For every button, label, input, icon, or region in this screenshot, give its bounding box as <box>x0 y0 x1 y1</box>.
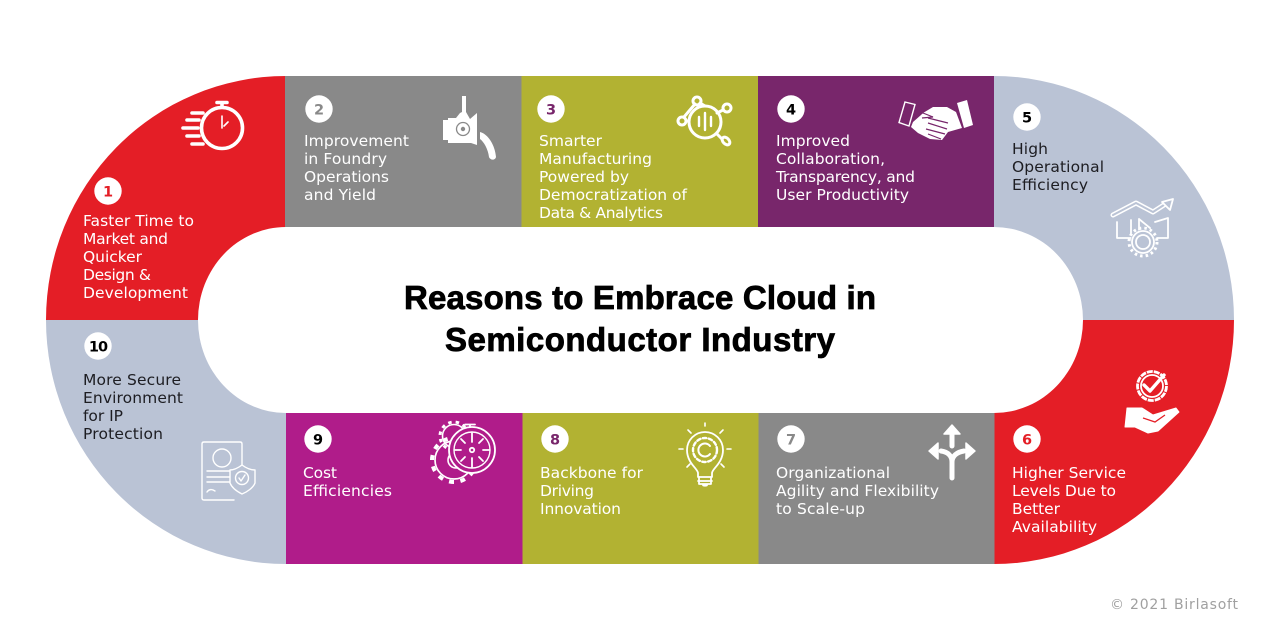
panel 10: secure environment: for IP <box>83 407 123 425</box>
panel 8: driving innovation <box>522 413 758 564</box>
panel 1: faster time to market: Market and <box>83 230 168 248</box>
panel 3: smarter manufacturing <box>522 76 758 227</box>
title <box>404 279 876 358</box>
panel 3: smarter manufacturing: Democratization of <box>539 186 688 204</box>
panel 5: operational efficiency: High <box>1012 140 1048 158</box>
panel 6: service levels <box>994 320 1234 564</box>
panel 6: service levels: Levels Due to <box>1012 482 1116 500</box>
panel 1: faster time to market: 1 <box>103 184 113 200</box>
panel 4: collaboration: Improved <box>776 132 850 150</box>
panel 9: cost efficiencies <box>286 413 522 564</box>
panel 3: smarter manufacturing: Manufacturing <box>539 150 652 168</box>
panel 10: secure environment <box>46 320 286 564</box>
panel 8: driving innovation: Innovation <box>540 500 621 518</box>
panel 6: service levels: Availability <box>1012 518 1097 536</box>
title: Semiconductor Industry <box>445 321 836 358</box>
panel 8: driving innovation: Backbone for <box>540 464 644 482</box>
panel 1: faster time to market: Quicker <box>83 248 143 266</box>
panel 2: foundry operations: 2 <box>314 102 324 118</box>
panel 3: smarter manufacturing: Powered by <box>539 168 629 186</box>
panel 9: cost efficiencies: 9 <box>313 432 323 448</box>
panel 4: collaboration: 4 <box>786 102 796 118</box>
panel 2: foundry operations: and Yield <box>304 186 376 204</box>
panel 2: foundry operations: in Foundry <box>304 150 387 168</box>
panel 7: organizational agility: Agility and Flexibility <box>776 482 939 500</box>
panel 1: faster time to market: Design & <box>83 266 151 284</box>
copyright: © 2021 Birlasoft <box>1110 597 1238 613</box>
panel 3: smarter manufacturing: Data & Analytics <box>539 204 663 222</box>
panel 5: operational efficiency: Efficiency <box>1012 176 1088 194</box>
panel 7: organizational agility: 7 <box>786 432 796 448</box>
panel 1: faster time to market: Development <box>83 284 188 302</box>
panel 3: smarter manufacturing: 3 <box>546 102 556 118</box>
panel 10: secure environment: Protection <box>83 425 163 443</box>
panel 4: collaboration <box>758 76 994 227</box>
panel 2: foundry operations: Operations <box>304 168 389 186</box>
panel 1: faster time to market: Faster Time to <box>83 212 194 230</box>
panel 6: service levels: Higher Service <box>1012 464 1126 482</box>
panel 5: operational efficiency <box>994 76 1234 320</box>
panel 4: collaboration: Transparency, and <box>775 168 915 186</box>
panel 10: secure environment: Environment <box>83 389 183 407</box>
panel 8: driving innovation: Driving <box>540 482 594 500</box>
panel 10: secure environment: 10 <box>89 340 108 356</box>
panel 7: organizational agility <box>758 413 994 564</box>
panel 5: operational efficiency: 5 <box>1022 110 1032 126</box>
panel 5: operational efficiency: Operational <box>1012 158 1104 176</box>
panel 8: driving innovation: 8 <box>550 432 560 448</box>
panel 7: organizational agility: Organizational <box>776 464 890 482</box>
panel 10: secure environment: More Secure <box>83 371 181 389</box>
panel 6: service levels: 6 <box>1022 432 1032 448</box>
panel 3: smarter manufacturing: Smarter <box>539 132 603 150</box>
panel 6: service levels: Better <box>1012 500 1061 518</box>
panel 2: foundry operations: Improvement <box>304 132 409 150</box>
panel 2: foundry operations <box>285 76 522 227</box>
panel 7: organizational agility: to Scale-up <box>776 500 865 518</box>
title: Reasons to Embrace Cloud in <box>404 279 876 316</box>
panel 1: faster time to market <box>46 76 286 320</box>
panel 9: cost efficiencies: Cost <box>303 464 337 482</box>
panel 9: cost efficiencies: Efficiencies <box>303 482 392 500</box>
panel 4: collaboration: Collaboration, <box>776 150 885 168</box>
panel 4: collaboration: User Productivity <box>776 186 909 204</box>
